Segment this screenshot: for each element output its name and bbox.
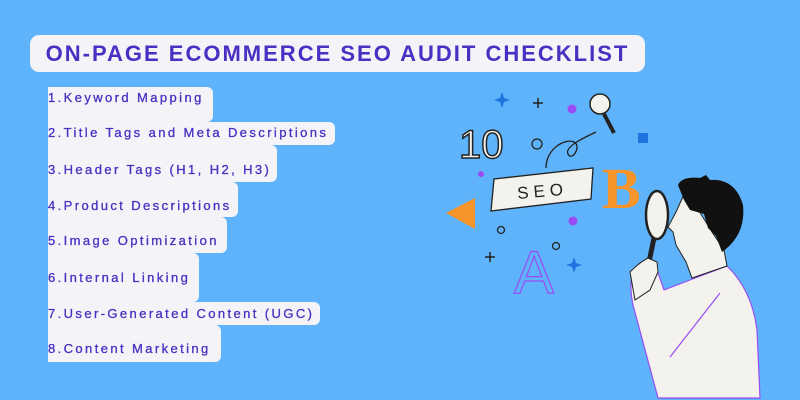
letter B: B	[602, 156, 641, 221]
item 3: 3.Header Tags (H1, H2, H3)	[48, 162, 271, 177]
item 8: 8.Content Marketing	[48, 341, 211, 356]
item 5: 5.Image Optimization	[48, 233, 219, 248]
item 4	[48, 182, 238, 217]
letter A: A	[514, 239, 554, 306]
title: ON-PAGE ECOMMERCE SEO AUDIT CHECKLIST	[46, 41, 629, 66]
title	[30, 35, 645, 72]
person	[630, 175, 760, 398]
item 7	[48, 302, 320, 325]
item 3	[48, 145, 277, 182]
hand	[630, 258, 658, 300]
body	[631, 264, 760, 398]
item 7: 7.User-Generated Content (UGC)	[48, 306, 314, 321]
curly line	[546, 132, 596, 168]
checklist	[48, 87, 335, 362]
item 1: 1.Keyword Mapping	[48, 90, 204, 105]
item 2	[48, 122, 335, 145]
hair	[678, 175, 743, 252]
SEO tag: SEO	[516, 180, 569, 203]
triangle	[446, 198, 475, 229]
icon: sparkles	[494, 92, 648, 273]
face	[668, 190, 727, 278]
item 2: 2.Title Tags and Meta Descriptions	[48, 125, 328, 140]
item 6	[48, 253, 199, 302]
number 10: 10	[459, 123, 504, 167]
item 5	[48, 217, 227, 253]
SEO tag	[491, 168, 593, 211]
dots	[478, 104, 578, 226]
icon: plus signs	[485, 98, 543, 262]
magnifier	[646, 191, 668, 239]
item 8	[48, 325, 221, 362]
item 6: 6.Internal Linking	[48, 270, 190, 285]
icon: small magnifier	[590, 94, 614, 133]
item 4: 4.Product Descriptions	[48, 198, 232, 213]
item 1	[48, 87, 213, 122]
